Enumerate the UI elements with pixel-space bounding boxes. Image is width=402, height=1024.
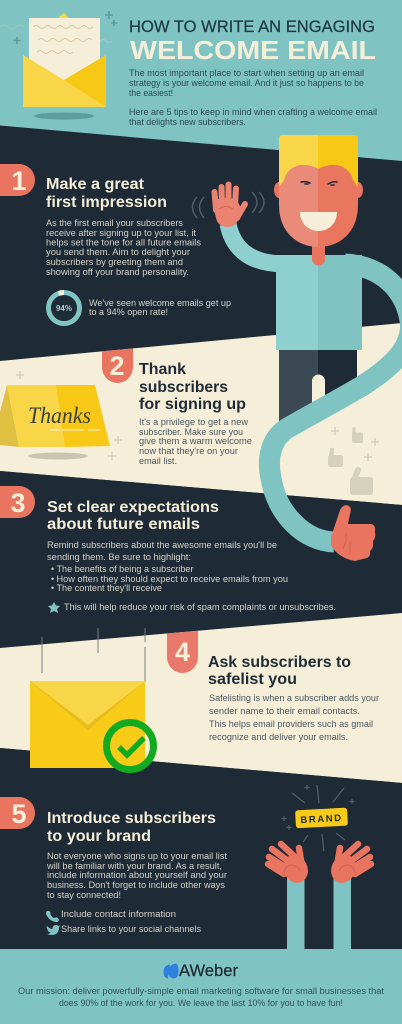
callout: spam note: This will help reduce your risk of spam complaints or unsubscribes.	[64, 602, 336, 612]
callout: open rate: to a 94% open rate!	[89, 307, 168, 317]
logo: AWeber: AWeber	[179, 961, 238, 980]
badge: number 3: 3	[10, 488, 26, 518]
text: tip 1 body: helps set the tone for all future emails	[46, 238, 202, 248]
text: tip 4 body: sender name to their email contacts.	[209, 706, 360, 716]
eyes	[301, 182, 337, 185]
heading: tip 1	[46, 176, 167, 211]
text: tip 2 body	[139, 417, 252, 466]
text: tip 3 body: Remind subscribers about the awesome emails you'll be	[47, 540, 277, 550]
heading: tip 2: subscribers	[139, 379, 228, 396]
icon: closed envelope with check	[30, 681, 154, 770]
badge: number 5: 5	[11, 799, 27, 829]
arms	[287, 878, 351, 949]
illustration: waving person with long arm	[192, 135, 402, 561]
heading: tip 4	[208, 654, 351, 688]
rays	[282, 785, 354, 851]
list: tip 3 bullets	[51, 564, 288, 593]
smile	[300, 212, 337, 231]
callout: open rate	[89, 298, 231, 317]
badge: number 4: 4	[175, 637, 190, 667]
icon: thanks card	[0, 385, 110, 460]
neck	[312, 240, 325, 266]
hair	[279, 135, 358, 186]
list: tip 3 bullets: The content they'll receive	[56, 583, 162, 593]
text: tip 5 body: Not everyone who signs up to your email list	[47, 851, 228, 861]
heading: tip 5: Introduce subscribers	[47, 810, 216, 827]
chart: 94% donut	[48, 292, 80, 324]
text: tip 2 body: It's a privilege to get a new	[139, 417, 249, 427]
text: tip 4 body: This helps email providers such as gmail	[209, 719, 373, 729]
panel: tip 5 dark band	[0, 748, 402, 950]
heading: tip 5	[47, 810, 216, 845]
intro text	[129, 68, 377, 127]
list: tip 3 bullets: •	[51, 583, 54, 593]
trousers	[279, 345, 357, 440]
text: tip 1 body: showing off your brand personality.	[46, 267, 189, 277]
icon: thanks card: Thanks	[28, 403, 91, 428]
text: tip 2 body: subscriber. Make sure you	[139, 427, 243, 437]
shirt	[276, 255, 362, 350]
title: WELCOME EMAIL	[130, 35, 376, 65]
waving hand	[213, 184, 245, 227]
text: tip 1 body: As the first email your subscribers	[46, 218, 184, 228]
title	[129, 17, 376, 65]
face	[279, 160, 358, 247]
heading: tip 5: to your brand	[47, 828, 151, 845]
text: footer mission: Our mission: deliver powerfully-simple email marketing software for small businesses that	[18, 986, 385, 996]
heading: tip 2: Thank	[139, 361, 186, 378]
heading: tip 4: safelist you	[208, 671, 297, 688]
icon: phone	[46, 911, 59, 922]
text: tip 4 body	[209, 693, 379, 742]
text: tip 1 body: receive after signing up to your list, it	[46, 228, 197, 238]
text: tip 1 body	[46, 218, 202, 277]
wave marks	[192, 192, 264, 218]
panel: tip 1 dark band	[0, 126, 402, 370]
title: HOW TO WRITE AN ENGAGING	[129, 17, 375, 36]
icon: twitter bird	[47, 925, 60, 935]
intro text: the easiest!	[129, 88, 173, 98]
list: tip 3 bullets: How often they should expect to receive emails from you	[56, 574, 288, 584]
text: contact item: Include contact information	[61, 909, 176, 919]
text: tip 5 body	[46, 851, 228, 900]
intro text: strategy is your welcome email. And it just so happens to be	[129, 78, 364, 88]
heading: tip 4: Ask subscribers to	[208, 654, 351, 671]
panel: tip 4 cream band	[0, 613, 402, 783]
illustration: hands holding brand tag	[268, 785, 371, 949]
intro text: Here are 5 tips to keep in mind when crafting a welcome email	[129, 107, 377, 117]
left hand	[268, 844, 308, 883]
panel: footer background	[0, 949, 402, 1024]
brand tag	[295, 808, 348, 828]
text: footer mission: does 90% of the work for you. We leave the last 10% for you to have fun!	[59, 998, 343, 1008]
heading: tip 2: for signing up	[139, 396, 246, 413]
badge: number 1	[0, 164, 35, 196]
icon: star	[48, 602, 60, 613]
text: tip 4 body: recognize and deliver your emails.	[209, 732, 348, 742]
intro text: that delights new subscribers.	[129, 117, 246, 127]
decoration: falling motion lines	[42, 628, 145, 682]
brand tag: BRAND	[300, 813, 343, 826]
text: tip 5 body: business. Don't forget to include other ways	[47, 880, 226, 890]
thumbs up hand	[331, 505, 375, 561]
text: tip 3 body	[47, 540, 277, 562]
list: tip 3 bullets: •	[51, 564, 54, 574]
ears	[274, 182, 363, 198]
text: tip 1 body: subscribers by greeting them and	[46, 257, 183, 267]
panel: tip 2 cream band	[0, 323, 402, 505]
heading: tip 3: Set clear expectations	[47, 499, 219, 516]
icon: small thumbs up group	[328, 429, 373, 495]
badge: number 1: 1	[11, 166, 27, 196]
list: tip 3 bullets: •	[51, 574, 54, 584]
badge: number 3	[0, 486, 35, 518]
badge: number 2	[102, 348, 133, 383]
waving arm	[228, 224, 285, 264]
long arm	[269, 264, 402, 542]
text: tip 5 body: will be familiar with your brand. As a result,	[46, 861, 222, 871]
list: tip 3 bullets: The benefits of being a subscriber	[56, 564, 194, 574]
text: footer mission	[18, 986, 385, 1008]
text: tip 2 body: give them a warm welcome	[139, 436, 252, 446]
icon: open envelope with letter	[0, 11, 117, 120]
text: tip 4 body: Safelisting is when a subscriber adds your	[209, 693, 379, 703]
heading: tip 3	[47, 499, 219, 533]
panel: tip 3 dark band	[0, 471, 402, 648]
right hand	[331, 844, 371, 883]
callout: open rate: We've seen welcome emails get up	[89, 298, 231, 308]
text: tip 5 body: include information about yourself and your	[47, 870, 227, 880]
text: social item: Share links to your social channels	[61, 924, 202, 934]
heading: tip 3: about future emails	[47, 516, 200, 533]
text: tip 2 body: now that they're on your	[139, 446, 238, 456]
badge: number 5	[0, 797, 35, 829]
badge: number 4	[167, 631, 198, 673]
text: tip 5 body: to stay connected!	[47, 890, 121, 900]
heading: tip 1: first impression	[46, 194, 167, 211]
chart: 94% donut: 94%	[56, 304, 72, 313]
intro text: The most important place to start when setting up an email	[129, 68, 364, 78]
heading: tip 1: Make a great	[46, 176, 144, 193]
text: tip 1 body: you send them. Aim to delight your	[46, 247, 190, 257]
panel: header background	[0, 0, 402, 170]
text: tip 3 body: sending them. Be sure to highlight:	[47, 552, 191, 562]
heading: tip 2	[139, 361, 246, 413]
badge: number 2: 2	[109, 351, 125, 381]
text: tip 2 body: email list.	[139, 456, 177, 466]
decoration: plus marks	[16, 371, 379, 461]
